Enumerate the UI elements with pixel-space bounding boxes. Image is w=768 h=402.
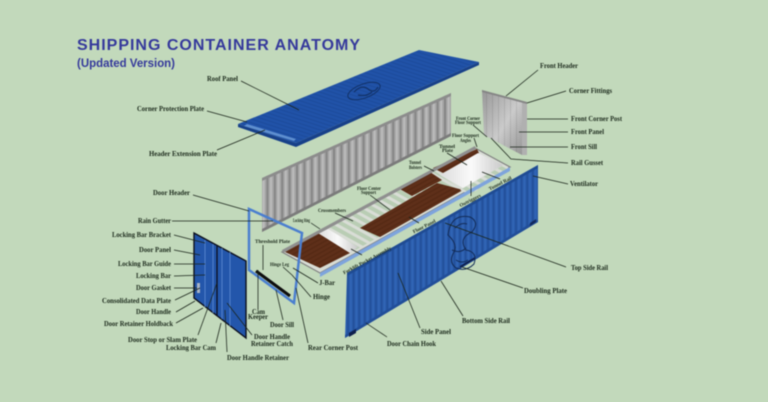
- label: Door Panel: [139, 246, 200, 255]
- label: Crossmembers: Crossmembers: [318, 209, 346, 214]
- grey rail: [282, 146, 476, 253]
- label: Rail Gusset: [491, 138, 604, 167]
- door frame: [249, 209, 302, 303]
- label: Door Stop or Slam Plate: Door Stop or Slam Plate: [128, 336, 197, 344]
- label: Bottom Side Rail: Bottom Side Rail: [462, 317, 510, 325]
- label: Door Handle Retainer Catch: [227, 303, 293, 348]
- side panel: [345, 165, 538, 338]
- label: Tunnel Plate: [439, 145, 467, 165]
- tunnel plate: [440, 153, 503, 188]
- label: Hinge: Hinge: [313, 293, 330, 301]
- label: Door Handle Retainer Catch: Retainer Catch: [251, 340, 293, 348]
- label: Door Stop or Slam Plate: [128, 283, 217, 344]
- label: Roof Panel: Roof Panel: [207, 75, 238, 83]
- label: Forklift Pocket Assembly: Forklift Pocket Assembly: [343, 246, 393, 276]
- label: Corner Fittings: [527, 87, 612, 103]
- label: Locking Ring: Locking Ring: [293, 219, 310, 224]
- title: SHIPPING CONTAINER ANATOMY: [77, 37, 360, 54]
- label: Front Sill: [510, 143, 597, 151]
- label: Locking Bar Guide: [118, 260, 205, 268]
- white forklift plate: [318, 229, 358, 253]
- label: Front Panel: [519, 128, 604, 136]
- label: Outriggers: [459, 181, 482, 209]
- label: Header Extension Plate: Header Extension Plate: [149, 150, 217, 158]
- label: Threshold Plate: Threshold Plate: [255, 240, 291, 245]
- subtitle: (Updated Version): [77, 58, 175, 70]
- label: Outriggers: Outriggers: [459, 194, 482, 209]
- label: Door Retainer Holdback: Door Retainer Holdback: [104, 320, 173, 328]
- label: Rear Corner Post: [296, 288, 359, 352]
- label: Front Corner Post: [527, 115, 623, 123]
- label: Door Handle: [136, 301, 195, 316]
- label: Front Panel: Front Panel: [571, 128, 604, 136]
- label: Floor Center Support: Support: [361, 191, 376, 196]
- label: Cam Keeper: Cam: [252, 308, 265, 316]
- label: Tunnel Rail: [482, 172, 513, 192]
- label: Door Handle Retainer: [225, 310, 289, 362]
- label: Floor Panel: Floor Panel: [413, 219, 437, 235]
- label: Rail Gusset: Rail Gusset: [571, 159, 604, 167]
- label: Crossmembers: [318, 209, 353, 221]
- label: Hinge Leg: Hinge Leg: [270, 263, 289, 268]
- label: Hinge: [292, 275, 330, 301]
- label: Door Sill: [270, 290, 294, 329]
- label: Locking Bar: [136, 272, 205, 280]
- label: Front Header: [506, 62, 578, 96]
- label: Door Handle: Door Handle: [136, 308, 171, 316]
- label: Locking Bar Bracket: Locking Bar Bracket: [112, 231, 172, 239]
- wood floor door end: [285, 233, 350, 268]
- label: Corner Protection Plate: Corner Protection Plate: [137, 105, 204, 113]
- label: Doubling Plate: [462, 267, 567, 295]
- label: Door Handle Retainer Catch: Door Handle: [254, 333, 290, 341]
- label: Top Side Rail: Top Side Rail: [571, 264, 608, 272]
- label: Front Header: Front Header: [540, 62, 578, 70]
- label: Rain Gutter: Rain Gutter: [138, 217, 171, 225]
- outriggers: [460, 166, 509, 195]
- label: Door Gasket: Door Gasket: [136, 284, 172, 292]
- label: Corner Protection Plate: [137, 105, 247, 122]
- label: Side Panel: [398, 273, 451, 336]
- label: Ventilator: [533, 176, 598, 188]
- label: Front Corner Floor Support: [455, 117, 487, 137]
- label: Locking Bar Cam: Locking Bar Cam: [166, 344, 216, 352]
- label: Threshold Plate: [255, 240, 291, 270]
- label: Locking Bar: Locking Bar: [136, 272, 171, 280]
- label: Bottom Side Rail: [441, 281, 510, 325]
- label: Door Header: Door Header: [153, 189, 190, 197]
- label: Tunnel Plate: Tunnel: [439, 145, 456, 150]
- label: Front Corner Post: Front Corner Post: [571, 115, 623, 123]
- label: Locking Ring: [293, 219, 320, 229]
- label: Front Sill: Front Sill: [571, 143, 597, 151]
- label: Tunnel Bolsters: [409, 161, 434, 171]
- roof panel: [238, 50, 479, 147]
- label: Floor Support Angles: [452, 134, 479, 147]
- floor frame: [282, 148, 510, 273]
- label: Floor Center Support: Floor Center: [357, 187, 382, 192]
- blue side rail: [320, 167, 510, 277]
- label: Front Corner Floor Support: Front Corner: [456, 117, 481, 122]
- label: Rain Gutter: [138, 217, 273, 225]
- label: Floor Support Angles: Angles: [460, 139, 471, 144]
- label: Locking Bar Cam: [166, 323, 221, 352]
- label: Consolidated Data Plate: [102, 288, 200, 305]
- floor assembly: [282, 146, 510, 277]
- label: Front Corner Floor Support: Floor Support: [455, 121, 481, 126]
- wood floor front: [433, 149, 479, 173]
- label: Consolidated Data Plate: Consolidated Data Plate: [102, 297, 171, 305]
- front panel: [482, 90, 527, 155]
- crossmembers: [328, 170, 463, 253]
- label: Tunnel Bolsters: Bolsters: [409, 166, 422, 171]
- wood floor centre: [360, 183, 463, 237]
- label: Locking Bar Guide: Locking Bar Guide: [118, 260, 171, 268]
- label: Floor Center Support: [357, 187, 390, 210]
- label: Cam Keeper: Keeper: [248, 313, 268, 321]
- label: Corner Fittings: Corner Fittings: [569, 87, 612, 95]
- label: Roof Panel: [207, 75, 299, 110]
- label: Locking Bar Bracket: [112, 231, 205, 243]
- label: Tunnel Bolsters: Tunnel: [409, 161, 421, 166]
- back side wall: [262, 93, 451, 232]
- label: Doubling Plate: Doubling Plate: [524, 287, 567, 295]
- label: Top Side Rail: [445, 223, 608, 272]
- label: Header Extension Plate: [149, 130, 265, 158]
- label: Rear Corner Post: Rear Corner Post: [308, 344, 359, 352]
- label: Tunnel Plate: Plate: [442, 149, 454, 154]
- label: Cam Keeper: [248, 270, 268, 321]
- label: Door Gasket: [136, 284, 197, 292]
- label: Hinge Leg: [270, 263, 292, 275]
- label: J-Bar: J-Bar: [319, 279, 335, 287]
- label: Door Chain Hook: [366, 323, 436, 348]
- label: Side Panel: Side Panel: [421, 328, 451, 336]
- label: J-Bar: [293, 268, 335, 287]
- label: Ventilator: Ventilator: [570, 180, 598, 188]
- wood floor upper: [398, 172, 442, 196]
- label: Door Header: [153, 189, 249, 211]
- label: Floor Support Angles: Floor Support: [452, 134, 479, 139]
- label: Tunnel Rail: Tunnel Rail: [488, 176, 513, 192]
- label: Door Sill: Door Sill: [270, 321, 294, 329]
- label: Door Handle Retainer: Door Handle Retainer: [227, 354, 289, 362]
- label: Door Panel: Door Panel: [139, 246, 171, 254]
- label: Door Chain Hook: Door Chain Hook: [387, 340, 436, 348]
- door panel: [194, 233, 246, 338]
- label: Door Retainer Holdback: [104, 308, 203, 328]
